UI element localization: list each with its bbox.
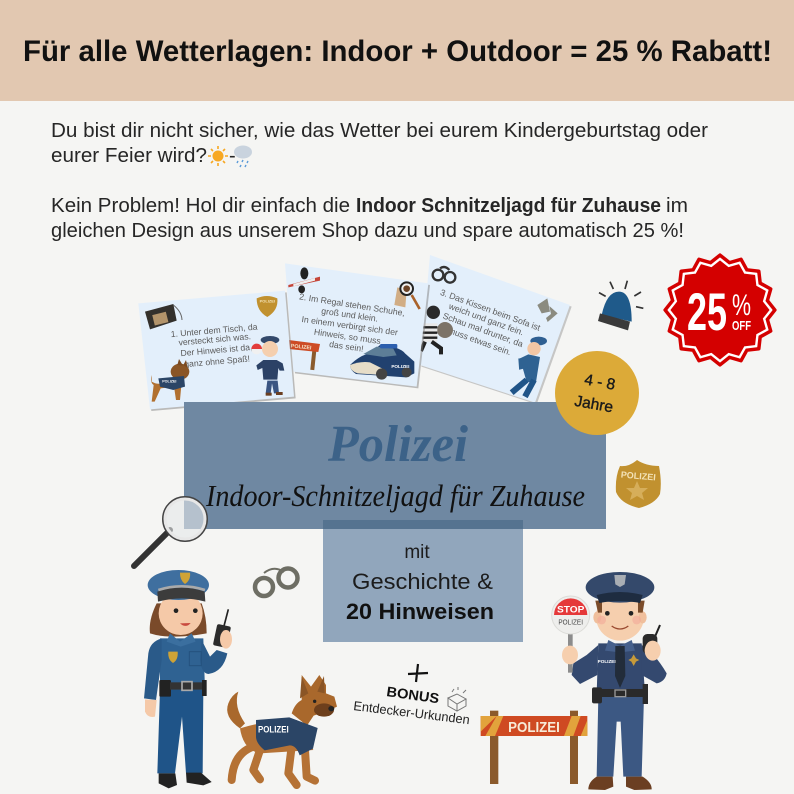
card 2: Hinweis, so muss [313,327,382,346]
card 3: muss etwas sein. [447,325,513,357]
card 2: das sein! [329,339,364,354]
bonus text: Entdecker-Urkunden [353,698,471,727]
icon: handcuffs [255,568,298,596]
header banner [0,0,794,101]
card 2: POLIZEI [290,343,312,352]
policeman with stop sign [552,572,667,790]
icon: gift box [448,687,466,711]
subtitle panel [323,520,523,642]
age badge: 4 - 8 [583,372,617,394]
icon: blue siren [598,281,643,330]
intro text block: eurer Feier wird? [51,145,207,167]
discount seal 25% off: OFF [732,318,751,333]
card 1: POLIZEI [162,380,176,384]
policeman with stop sign: STOP [557,605,584,615]
card 1: 1. Unter dem Tisch, da [170,322,258,339]
policewoman [144,570,232,788]
card 2: POLIZEI [391,364,409,369]
subtitle panel: 20 Hinweisen [346,599,494,624]
card 1: POLIZEI [260,298,275,303]
subtitle panel: mit [404,542,430,563]
card 1: Der Hinweis ist da, [180,342,253,358]
age badge: Jahre [573,393,614,416]
intro text block: gleichen Design aus unserem Shop dazu und spare automatisch 25 %! [51,220,684,242]
plus sign [408,664,428,682]
intro text block [51,120,708,242]
card 3: Schau mal drunter, da [442,311,525,349]
card 3 [420,255,572,404]
icon: police badge [616,460,661,508]
police barrier: POLIZEI [508,720,560,736]
header banner: Für alle Wetterlagen: Indoor + Outdoor = 25 % Rabatt! [23,35,772,68]
police barrier [481,711,587,784]
discount seal 25% off: 25 [687,283,727,342]
age badge [555,351,639,435]
intro text block: im [666,195,688,217]
police dog [227,675,337,785]
icon: police badge: POLIZEI [620,470,656,483]
police dog: POLIZEI [258,724,289,734]
card 1: versteckt sich was. [178,331,251,347]
discount seal 25% off [665,255,775,365]
card 2: In einem verbirgt sich der [301,314,399,337]
card 2: 2. Im Regal stehen Schuhe, [299,291,406,318]
subtitle: Indoor-Schnitzeljagd: Indoor-Schnitzeljagd für Zuhause [205,478,585,513]
intro text block: Kein Problem! Hol dir einfach die [51,195,350,217]
intro text block: Du bist dir nicht sicher, wie das Wetter bei eurem Kindergeburtstag oder [51,120,708,142]
card 1: ganz ohne Spaß! [184,353,250,369]
intro text block: - [229,145,236,167]
discount seal 25% off: % [732,289,751,322]
main title panel [184,402,606,529]
card 1 [138,291,296,411]
policeman with stop sign: POLIZEI [598,659,616,664]
title: Polizei: Polizei [327,416,469,473]
bonus text [353,683,471,727]
card 2: groß und klein. [321,306,379,324]
intro text block: Indoor Schnitzeljagd für Zuhause [356,195,661,217]
hint cards group [138,255,572,411]
icon: magnifying glass [134,497,207,566]
card 3: weich und ganz fein. [447,301,525,337]
bonus text: BONUS [386,683,440,706]
subtitle panel: Geschichte & [352,569,493,594]
card 2 [285,263,430,388]
policeman with stop sign: POLIZEI [558,620,583,627]
card 3: 3. Das Kissen beim Sofa ist [439,287,542,333]
